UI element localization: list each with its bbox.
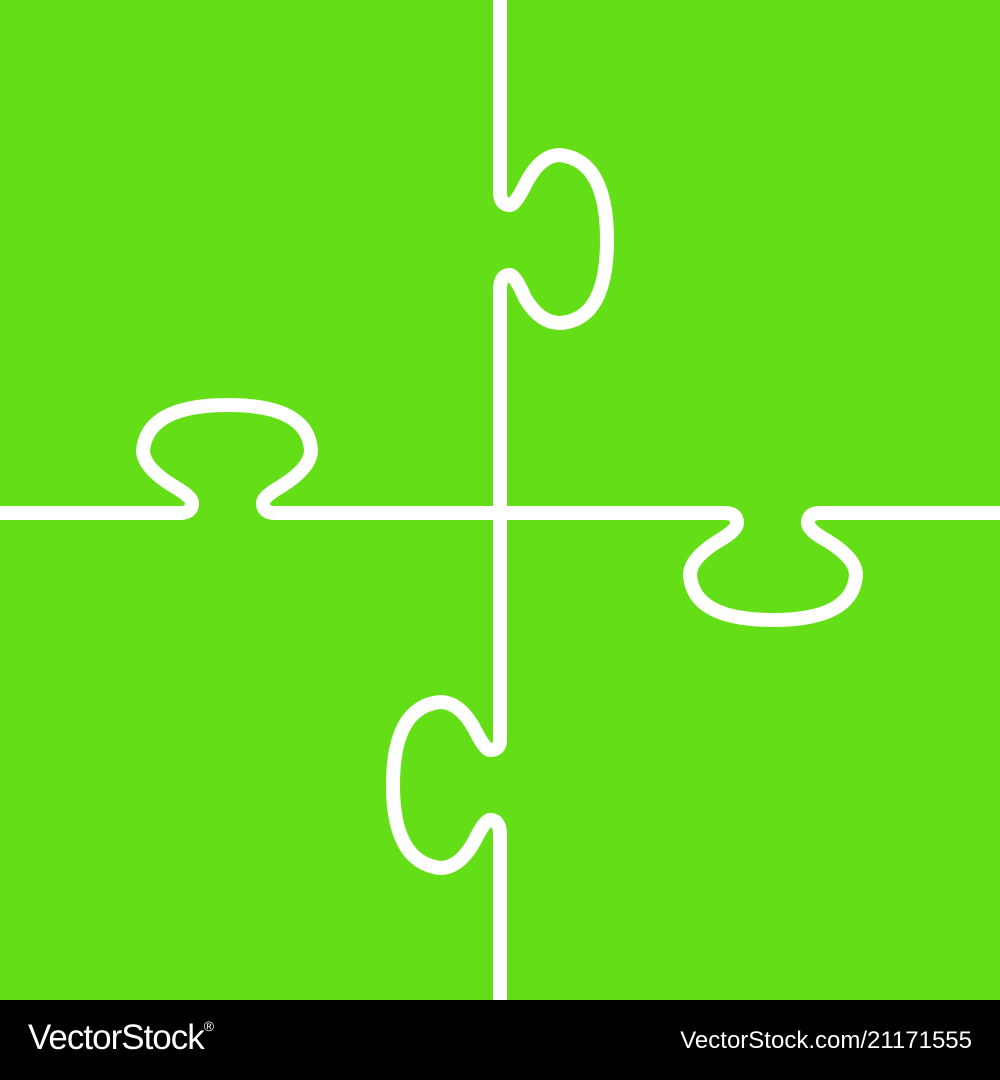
horizontal seam with knobs xyxy=(0,405,1000,620)
vertical seam with knobs xyxy=(393,0,607,1000)
image id text: VectorStock.com/21171555 xyxy=(680,1027,972,1054)
footer: watermark bar xyxy=(0,1000,1000,1080)
brand text: VectorStock® xyxy=(28,1018,213,1057)
